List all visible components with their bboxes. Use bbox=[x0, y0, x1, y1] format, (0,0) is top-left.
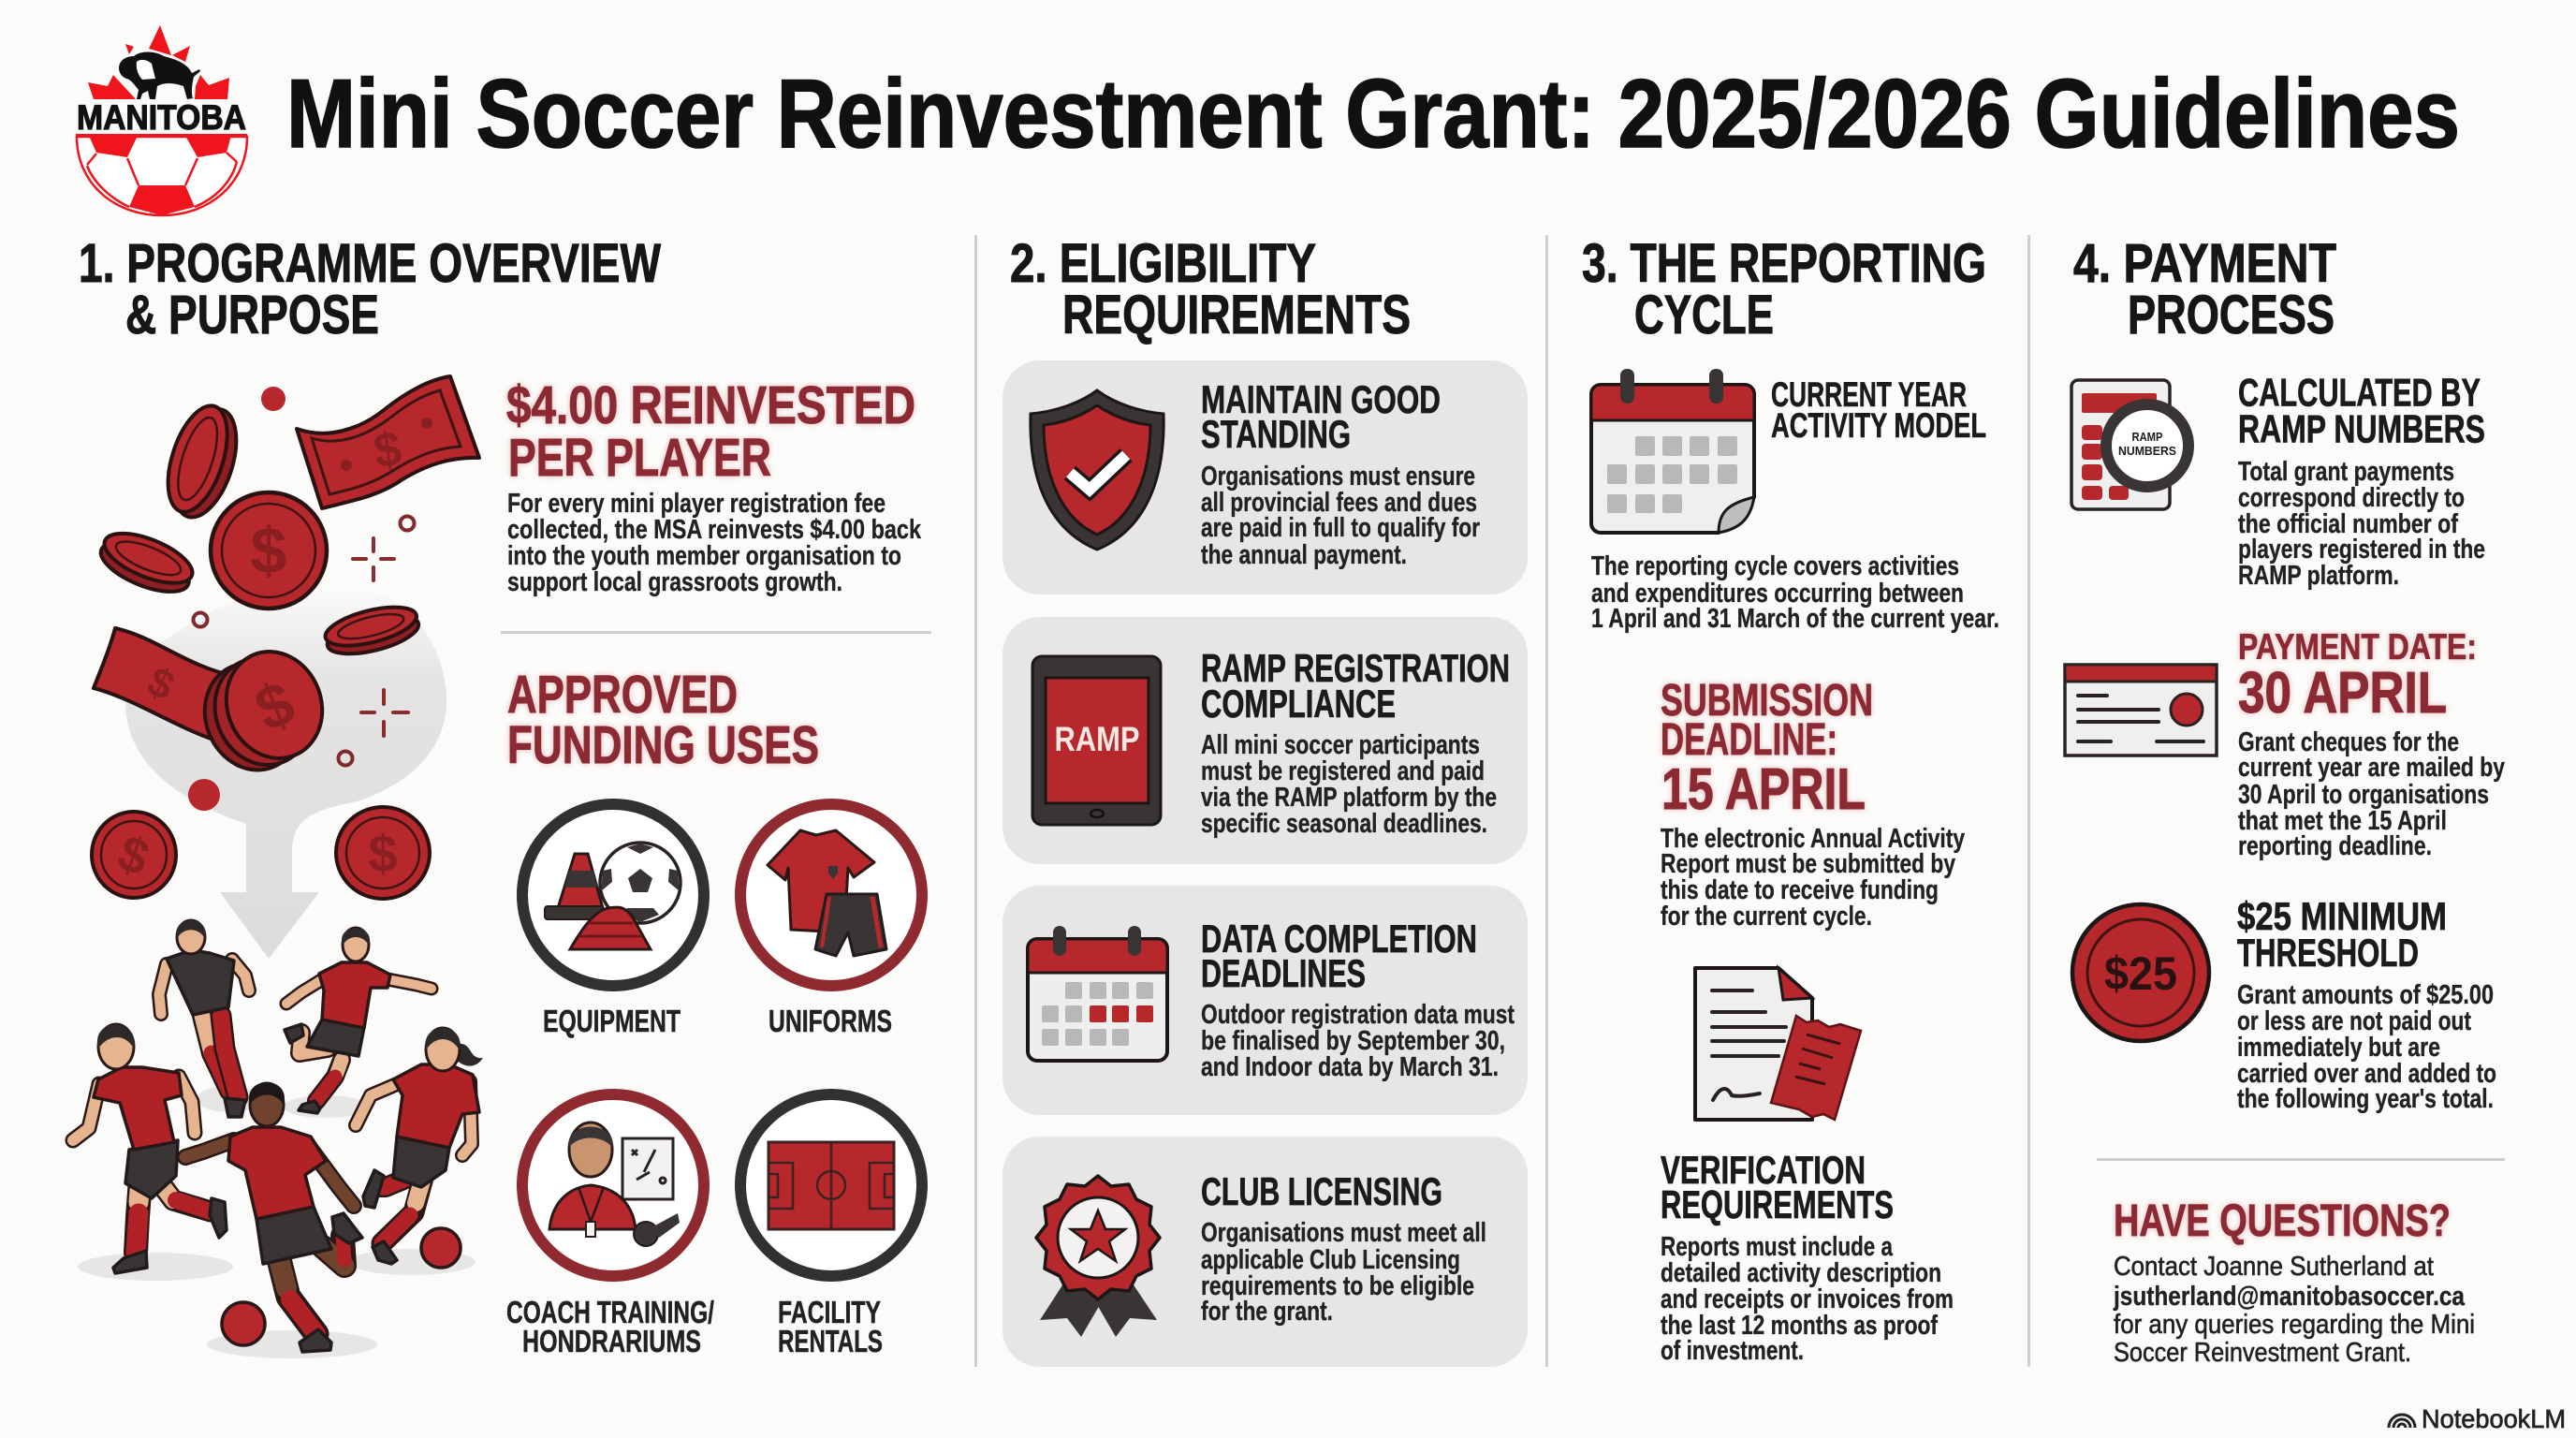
text: $25 minimum threshold: carried over and added to bbox=[2237, 1059, 2496, 1089]
callout: have questions: for any queries regarding the Mini bbox=[2114, 1310, 2475, 1340]
text: calculated by RAMP numbers: players registered in the bbox=[2238, 535, 2485, 565]
callout: have questions: jsutherland@manitobasoccer.ca bbox=[2113, 1282, 2466, 1312]
text: $25 minimum threshold: immediately but are bbox=[2237, 1033, 2440, 1063]
heading: section 1 bbox=[79, 233, 661, 345]
icon: coin lower right: $ bbox=[368, 824, 398, 883]
card: club licensing: CLUB LICENSING bbox=[1201, 1169, 1442, 1213]
heading: section 1: 1. PROGRAMME OVERVIEW bbox=[79, 233, 661, 294]
player: dark shirt runner bbox=[159, 920, 249, 1117]
icon: lower bill: $ bbox=[140, 658, 181, 710]
text: $25 minimum threshold: the following year's total. bbox=[2237, 1084, 2494, 1114]
text: verification requirements: REQUIREMENTS bbox=[1661, 1182, 1894, 1226]
card: maintain good standing: Organisations must ensure bbox=[1201, 462, 1475, 492]
card: RAMP registration compliance: All mini soccer participants bbox=[1201, 730, 1480, 760]
card: maintain good standing: the annual payment. bbox=[1201, 540, 1407, 570]
card: maintain good standing: are paid in full to qualify for bbox=[1201, 513, 1480, 543]
text: verification requirements: Reports must include a bbox=[1661, 1232, 1894, 1262]
callout: payment date: PAYMENT DATE: bbox=[2238, 627, 2477, 668]
icon: coin stack: $ bbox=[245, 668, 303, 744]
card: RAMP registration compliance: RAMP REGISTRATION bbox=[1201, 646, 1510, 690]
text: calculated by RAMP numbers: Total grant payments bbox=[2238, 457, 2454, 487]
card: RAMP registration compliance: COMPLIANCE bbox=[1201, 682, 1396, 726]
card: RAMP registration compliance: via the RAMP platform by the bbox=[1201, 783, 1497, 813]
callout: submission deadline: Report must be submitted by bbox=[1661, 849, 1955, 879]
label: coach training and honorariums bbox=[506, 1295, 714, 1358]
heading: section 3 bbox=[1582, 233, 1986, 345]
icon: top bill bbox=[297, 376, 479, 508]
icon: top bill: $ bbox=[371, 421, 405, 479]
label: equipment: EQUIPMENT bbox=[543, 1004, 681, 1038]
heading: approved funding uses: FUNDING USES bbox=[507, 715, 819, 775]
logo: Manitoba soccer crest: MANITOBA bbox=[77, 98, 246, 137]
panel: programme overview and purpose bbox=[73, 233, 931, 1358]
callout: have questions bbox=[2113, 1196, 2475, 1368]
icon: coin lower right bbox=[336, 807, 430, 899]
icon: RAMP tablet bbox=[1032, 656, 1161, 825]
text: reporting cycle description: 1 April and 31 March of the current year. bbox=[1591, 604, 1999, 634]
callout: submission deadline: DEADLINE: bbox=[1661, 715, 1837, 765]
icon: flat coin right bbox=[322, 599, 422, 661]
callout: have questions: HAVE QUESTIONS? bbox=[2114, 1196, 2451, 1246]
icon: flat coin left bbox=[95, 523, 198, 602]
watermark: NotebookLM: NotebookLM bbox=[2422, 1404, 2566, 1433]
callout: submission deadline bbox=[1661, 676, 1965, 932]
logo: Manitoba soccer crest bbox=[76, 25, 247, 215]
card: club licensing: requirements to be eligible bbox=[1201, 1271, 1474, 1301]
icon: calendar bbox=[1028, 926, 1167, 1061]
heading: section 3: CYCLE bbox=[1634, 285, 1774, 345]
callout: submission deadline: SUBMISSION bbox=[1661, 676, 1873, 726]
callout: payment date: that met the 15 April bbox=[2238, 806, 2447, 836]
label: coach training and honorariums: HONDRARIUMS bbox=[522, 1324, 701, 1358]
icon: coin stack bbox=[188, 637, 339, 785]
callout: $4.00 reinvested per player: For every mini player registration fee bbox=[507, 489, 886, 519]
card: maintain good standing bbox=[1003, 360, 1528, 594]
player: left runner bbox=[73, 1024, 227, 1273]
callout: payment date: Grant cheques for the bbox=[2238, 727, 2459, 757]
text: calculated by RAMP numbers: the official number of bbox=[2238, 509, 2458, 539]
icon: equipment bbox=[522, 804, 704, 986]
panel: payment process bbox=[2065, 233, 2505, 1368]
text: verification requirements: of investment. bbox=[1661, 1336, 1804, 1366]
callout: $4.00 reinvested per player: support local grassroots growth. bbox=[507, 567, 842, 597]
panel: eligibility requirements bbox=[1003, 233, 1528, 1367]
text: $25 minimum threshold: $25 MINIMUM bbox=[2237, 894, 2447, 938]
callout: have questions: Soccer Reinvestment Grant. bbox=[2114, 1338, 2411, 1368]
label: facility rentals: RENTALS bbox=[778, 1324, 883, 1358]
text: $25 minimum threshold: Grant amounts of $25.00 bbox=[2237, 980, 2494, 1010]
card: maintain good standing: STANDING bbox=[1201, 412, 1351, 456]
icon: $25 coin bbox=[2072, 904, 2209, 1041]
player: kicking midfielder bbox=[285, 928, 432, 1113]
column divider 3 bbox=[2027, 235, 2030, 1367]
illustration: falling coins and bills bbox=[92, 376, 479, 899]
callout: payment date: current year are mailed by bbox=[2238, 753, 2505, 783]
column divider 1 bbox=[974, 235, 977, 1367]
illustration: youth soccer players bbox=[73, 920, 483, 1358]
callout: $4.00 reinvested per player: PER PLAYER bbox=[508, 428, 771, 488]
panel: the reporting cycle bbox=[1582, 233, 1999, 1366]
card: data completion deadlines: Outdoor registration data must bbox=[1201, 1000, 1515, 1030]
card: data completion deadlines: DEADLINES bbox=[1201, 951, 1366, 995]
label: uniforms: UNIFORMS bbox=[768, 1004, 892, 1038]
card: RAMP registration compliance bbox=[1003, 617, 1528, 864]
column divider 2 bbox=[1545, 235, 1548, 1367]
icon: rosette badge bbox=[1036, 1176, 1160, 1337]
label: facility rentals: FACILITY bbox=[778, 1295, 881, 1329]
icon: lower bill bbox=[94, 628, 234, 740]
card: club licensing bbox=[1003, 1137, 1528, 1367]
icon: coin lower left: $ bbox=[110, 825, 156, 887]
callout: $4.00 reinvested per player bbox=[506, 375, 921, 597]
icon: large coin bbox=[211, 492, 327, 609]
card: maintain good standing: MAINTAIN GOOD bbox=[1201, 377, 1441, 421]
text: reporting cycle description: and expenditures occurring between bbox=[1591, 579, 1964, 609]
icon: large coin: $ bbox=[251, 514, 286, 587]
label: coach training and honorariums: COACH TRAINING/ bbox=[506, 1295, 714, 1329]
heading: section 2: 2. ELIGIBILITY bbox=[1010, 233, 1316, 294]
callout: payment date: 30 April to organisations bbox=[2238, 780, 2489, 810]
icon: calendar with page curl bbox=[1591, 369, 1754, 533]
text: calculated by RAMP numbers bbox=[2238, 371, 2485, 591]
callout: submission deadline: this date to receive funding bbox=[1661, 875, 1939, 905]
callout: submission deadline: The electronic Annual Activity bbox=[1661, 824, 1965, 854]
heading: section 4: 4. PAYMENT bbox=[2073, 233, 2336, 294]
illustration: grey funnel arrow bbox=[125, 586, 446, 959]
player: right runner with ponytail bbox=[356, 1028, 483, 1268]
icon: coach training bbox=[522, 1094, 704, 1276]
icon: tilted coin bbox=[155, 399, 249, 525]
text: calculated by RAMP numbers: RAMP platform. bbox=[2238, 561, 2399, 591]
text: verification requirements: the last 12 months as proof bbox=[1661, 1311, 1938, 1341]
heading: section 4 bbox=[2073, 233, 2336, 345]
text: calculated by RAMP numbers: CALCULATED BY bbox=[2238, 371, 2481, 414]
callout: payment date: 30 APRIL bbox=[2238, 661, 2447, 726]
icon: cheque bbox=[2065, 665, 2217, 756]
card: data completion deadlines: be finalised by September 30, bbox=[1201, 1026, 1505, 1056]
text: $25 minimum threshold bbox=[2237, 894, 2496, 1114]
heading: section 2 bbox=[1010, 233, 1411, 345]
card: maintain good standing: all provincial fees and dues bbox=[1201, 488, 1477, 518]
icon: calculator with magnifier showing RAMP numbers: NUMBERS bbox=[2118, 444, 2176, 458]
text: verification requirements bbox=[1661, 1148, 1954, 1366]
text: verification requirements: VERIFICATION bbox=[1661, 1148, 1866, 1192]
subheading: current year activity model: ACTIVITY MODEL bbox=[1771, 406, 1986, 445]
text: $25 minimum threshold: or less are not paid out bbox=[2237, 1006, 2471, 1036]
card: RAMP registration compliance: specific seasonal deadlines. bbox=[1201, 809, 1487, 839]
heading: approved funding uses bbox=[507, 665, 819, 775]
icon: $25 coin: $25 bbox=[2104, 947, 2177, 1000]
callout: $4.00 reinvested per player: $4.00 REINVESTED bbox=[506, 375, 915, 435]
label: facility rentals bbox=[778, 1295, 883, 1358]
card: club licensing: applicable Club Licensing bbox=[1201, 1245, 1460, 1275]
text: reporting cycle description bbox=[1591, 551, 1999, 634]
card: data completion deadlines: and Indoor data by March 31. bbox=[1201, 1052, 1499, 1082]
icon: facility rentals bbox=[740, 1094, 922, 1276]
card: data completion deadlines bbox=[1003, 886, 1528, 1115]
callout: payment date: reporting deadline. bbox=[2238, 831, 2432, 861]
heading: approved funding uses: APPROVED bbox=[507, 665, 738, 725]
text: calculated by RAMP numbers: correspond directly to bbox=[2238, 483, 2465, 513]
callout: submission deadline: for the current cycle. bbox=[1661, 902, 1872, 932]
text: $25 minimum threshold: THRESHOLD bbox=[2237, 931, 2419, 975]
callout: $4.00 reinvested per player: into the youth member organisation to bbox=[507, 541, 901, 571]
callout: $4.00 reinvested per player: collected, the MSA reinvests $4.00 back bbox=[507, 515, 921, 545]
subheading: current year activity model bbox=[1771, 375, 1986, 445]
icon: coin lower left bbox=[92, 812, 176, 898]
icon: calculator with magnifier showing RAMP numbers bbox=[2071, 380, 2188, 509]
card: RAMP registration compliance: must be registered and paid bbox=[1201, 756, 1485, 786]
card: club licensing: for the grant. bbox=[1201, 1297, 1333, 1327]
heading: section 3: 3. THE REPORTING bbox=[1582, 233, 1986, 294]
callout: submission deadline: 15 APRIL bbox=[1661, 757, 1866, 822]
heading: section 2: REQUIREMENTS bbox=[1062, 285, 1411, 345]
card: data completion deadlines: DATA COMPLETION bbox=[1201, 917, 1477, 961]
heading: section 4: PROCESS bbox=[2128, 285, 2334, 345]
text: verification requirements: detailed activity description bbox=[1661, 1258, 1941, 1288]
card: club licensing: Organisations must meet all bbox=[1201, 1218, 1486, 1248]
subheading: current year activity model: CURRENT YEAR bbox=[1771, 375, 1967, 414]
icon: document and receipt bbox=[1695, 968, 1861, 1120]
player: front striker bbox=[185, 1082, 362, 1352]
text: verification requirements: and receipts or invoices from bbox=[1661, 1284, 1954, 1314]
icon: calculator with magnifier showing RAMP numbers: RAMP bbox=[2132, 430, 2163, 444]
text: calculated by RAMP numbers: RAMP NUMBERS bbox=[2238, 406, 2485, 451]
icon: RAMP tablet: RAMP bbox=[1054, 720, 1140, 758]
callout: payment date bbox=[2238, 627, 2505, 861]
icon: uniforms bbox=[740, 804, 922, 986]
heading: section 1: & PURPOSE bbox=[125, 285, 379, 345]
callout: have questions: Contact Joanne Sutherland at bbox=[2114, 1252, 2434, 1282]
text: reporting cycle description: The reporting cycle covers activities bbox=[1591, 551, 1959, 581]
icon: shield with check bbox=[1031, 390, 1164, 550]
